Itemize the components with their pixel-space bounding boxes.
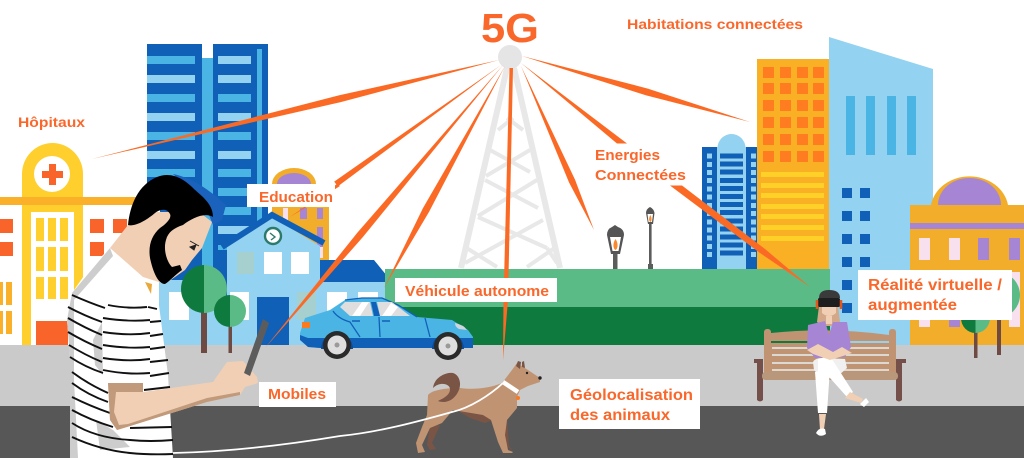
building: blue twin towers bbox=[147, 44, 268, 288]
label: Education bbox=[247, 184, 335, 207]
woman with VR headset bbox=[807, 290, 869, 436]
label: Mobiles: Mobiles bbox=[268, 386, 326, 403]
label: Energies Connectées: Energies bbox=[595, 148, 660, 164]
man: collar bbox=[145, 282, 152, 294]
icon: red cross bbox=[42, 164, 63, 185]
label: Réalité virtuelle / augmentée bbox=[858, 270, 1012, 320]
leash bbox=[173, 383, 503, 453]
label: Géolocalisation des animaux: des animaux bbox=[570, 407, 670, 424]
tablet bbox=[244, 319, 269, 376]
man: lighter blue shape behind head bbox=[173, 174, 226, 225]
label: Géolocalisation des animaux: Géolocalisation bbox=[570, 387, 693, 404]
hedge: green wall bbox=[385, 269, 830, 345]
label: Energies Connectées: Connectées bbox=[595, 168, 686, 184]
man: shirt stripes bbox=[68, 295, 173, 454]
label: Réalité virtuelle / augmentée: Réalité virtuelle / bbox=[868, 277, 1003, 294]
label: Mobiles bbox=[259, 382, 336, 407]
tree: right near bbox=[961, 303, 990, 358]
car bbox=[300, 298, 473, 360]
tree: left large bbox=[181, 265, 227, 353]
street lamp: small bbox=[646, 207, 654, 269]
antenna head bbox=[498, 45, 522, 69]
label: Véhicule autonome: Véhicule autonome bbox=[405, 283, 549, 300]
building: tower block left base bbox=[159, 280, 227, 345]
label: Energies Connectées bbox=[595, 148, 686, 184]
building: right domed building bbox=[910, 176, 1024, 345]
signal rays from the antenna bbox=[92, 56, 810, 360]
man: hair and beard bbox=[128, 175, 213, 284]
man: arm shading bbox=[108, 383, 240, 430]
sidewalk bbox=[0, 345, 1024, 406]
building: small blue house bbox=[320, 260, 392, 345]
street lamp: large bbox=[607, 225, 624, 269]
man: arm bbox=[108, 361, 258, 430]
label: Réalité virtuelle / augmentée: augmentée bbox=[868, 297, 957, 314]
man: head and neck bbox=[110, 212, 212, 284]
label: Hôpitaux: Hôpitaux bbox=[18, 114, 85, 130]
man: shirt bbox=[67, 250, 173, 458]
building: hospital bbox=[0, 143, 160, 345]
label: Education: Education bbox=[259, 189, 333, 206]
antenna tower bbox=[461, 68, 560, 268]
tree: right far bbox=[974, 272, 1020, 355]
man: eye bbox=[190, 241, 199, 250]
label: Véhicule autonome bbox=[395, 278, 557, 302]
man: shirt shading bbox=[67, 248, 130, 458]
label: Habitations connectées: Habitations connectées bbox=[627, 16, 803, 32]
road bbox=[0, 406, 1024, 458]
building: right small blue tower bbox=[702, 134, 761, 269]
man looking at a tablet bbox=[67, 174, 269, 458]
label: Géolocalisation des animaux bbox=[559, 379, 700, 429]
building: light blue slanted tower bbox=[829, 37, 933, 345]
label: 5G: 5G bbox=[481, 5, 539, 51]
bench bbox=[754, 329, 906, 402]
building: school bbox=[213, 215, 324, 345]
building: orange tower bbox=[757, 59, 829, 269]
dog bbox=[416, 361, 542, 453]
building: dome behind school bbox=[272, 168, 329, 264]
tree: left small bbox=[214, 295, 246, 353]
icon: clock bbox=[265, 228, 281, 244]
